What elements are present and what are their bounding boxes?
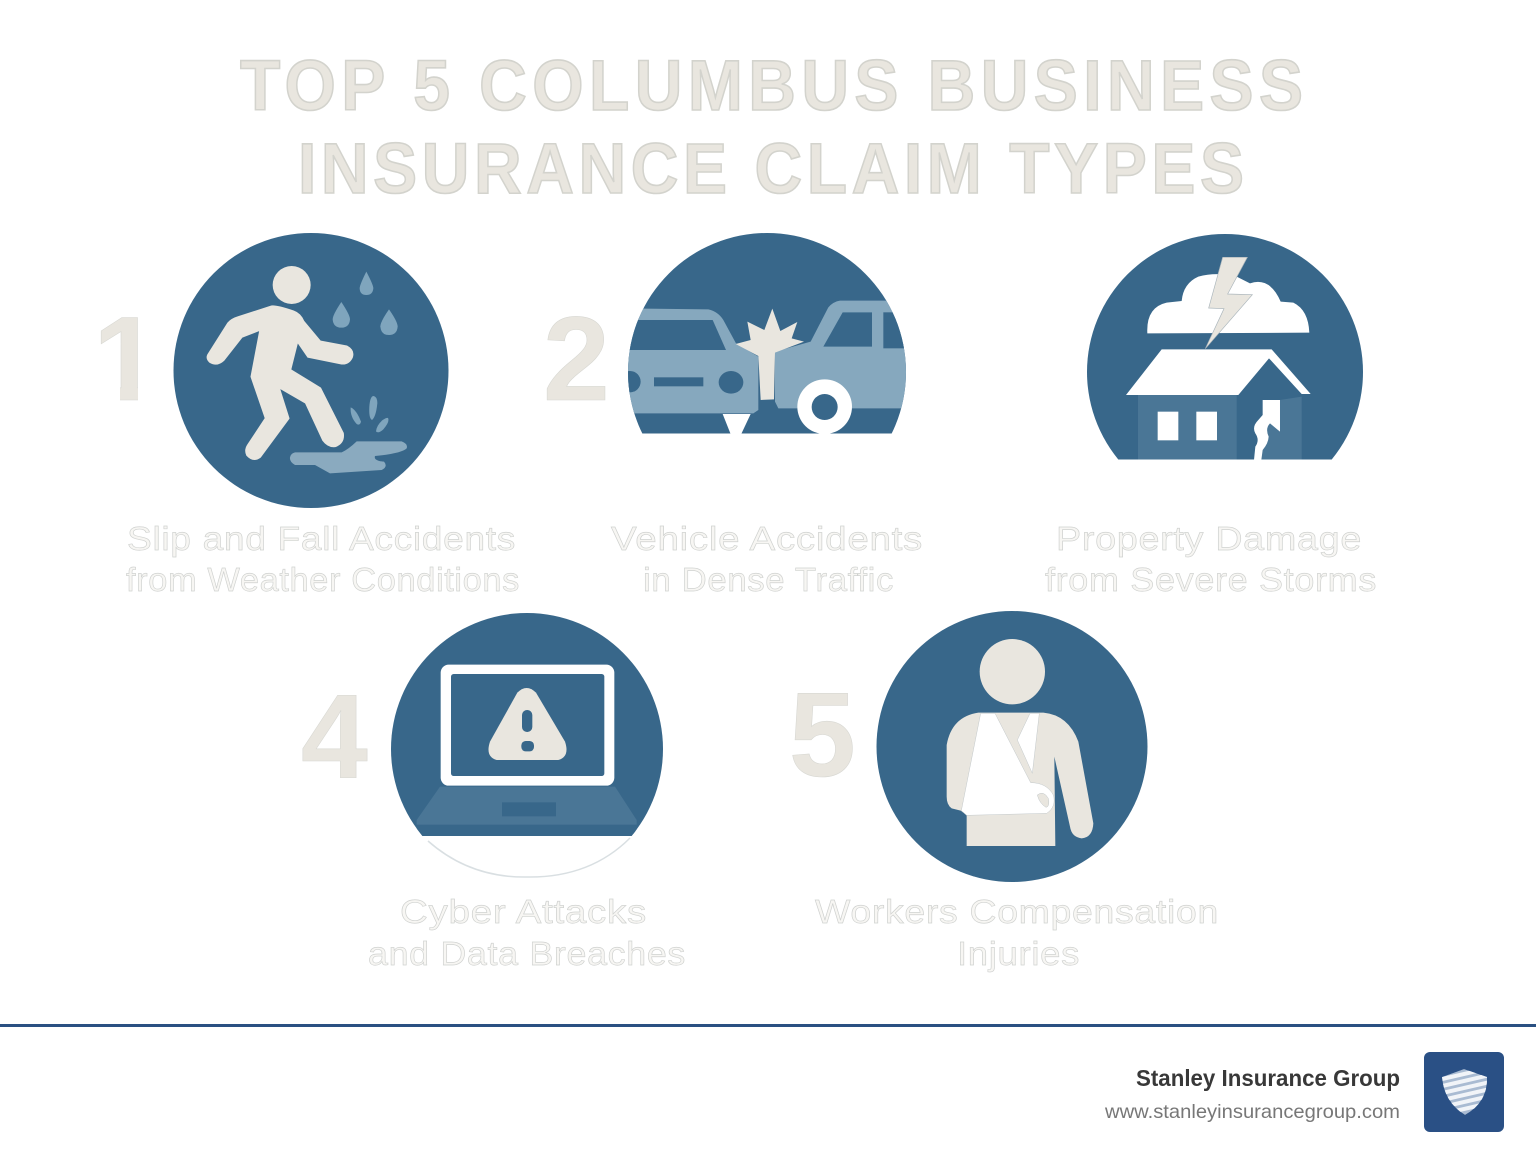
website: www.stanleyinsurancegroup.com — [1104, 1101, 1400, 1123]
icon: slipping person in rain — [174, 233, 448, 508]
label: vehicle accidents: in Dense Traffic — [643, 562, 894, 599]
number 1: 1 — [93, 292, 160, 426]
icon: storm over house — [1087, 234, 1363, 460]
label: workers compensation — [815, 894, 1219, 973]
title: INSURANCE CLAIM TYPES — [298, 129, 1244, 209]
icon: car collision — [628, 233, 906, 434]
icon: injured worker with sling — [876, 611, 1148, 882]
item 5: workers compensation — [789, 611, 1219, 973]
item 3: property damage — [1045, 234, 1377, 599]
label: slip and fall: from Weather Conditions — [126, 562, 520, 599]
footer brand — [1104, 1052, 1504, 1132]
label: property damage — [1045, 521, 1377, 599]
item 2: vehicle accidents — [543, 233, 923, 599]
number 4: 4 — [301, 670, 368, 804]
label: vehicle accidents — [611, 521, 923, 599]
icon: laptop with warning — [391, 613, 663, 885]
label: slip and fall: Slip and Fall Accidents — [127, 521, 516, 558]
title: TOP 5 COLUMBUS BUSINESS — [240, 46, 1303, 126]
label: cyber attacks: and Data Breaches — [368, 936, 686, 973]
number 2: 2 — [543, 292, 610, 426]
label: property damage: Property Damage — [1056, 521, 1362, 558]
number 5: 5 — [789, 668, 856, 802]
label: slip and fall — [126, 521, 520, 599]
logo: shield — [1424, 1052, 1504, 1132]
label: workers compensation: Workers Compensation — [815, 894, 1219, 931]
label: property damage: from Severe Storms — [1045, 562, 1377, 599]
label: workers compensation: Injuries — [957, 936, 1080, 973]
item 4: cyber attacks — [301, 613, 686, 973]
brand name: Stanley Insurance Group — [1136, 1065, 1400, 1091]
label: cyber attacks: Cyber Attacks — [400, 894, 647, 931]
label: cyber attacks — [368, 894, 686, 973]
title — [240, 46, 1303, 209]
item 1: slip and fall — [93, 233, 520, 599]
label: vehicle accidents: Vehicle Accidents — [611, 521, 923, 558]
